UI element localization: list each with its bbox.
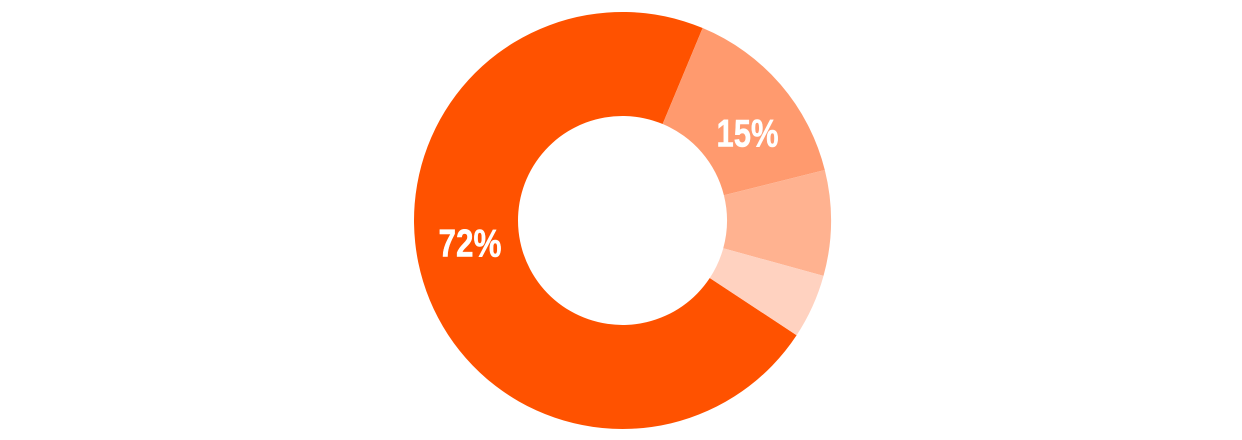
slice: 15% bbox=[663, 28, 825, 195]
slice: 5% bbox=[710, 248, 824, 335]
label: 15%: 15% bbox=[716, 112, 778, 156]
label: 72%: 72% bbox=[438, 222, 502, 266]
slice: 72% bbox=[414, 12, 797, 429]
slice: 8% bbox=[723, 170, 831, 276]
